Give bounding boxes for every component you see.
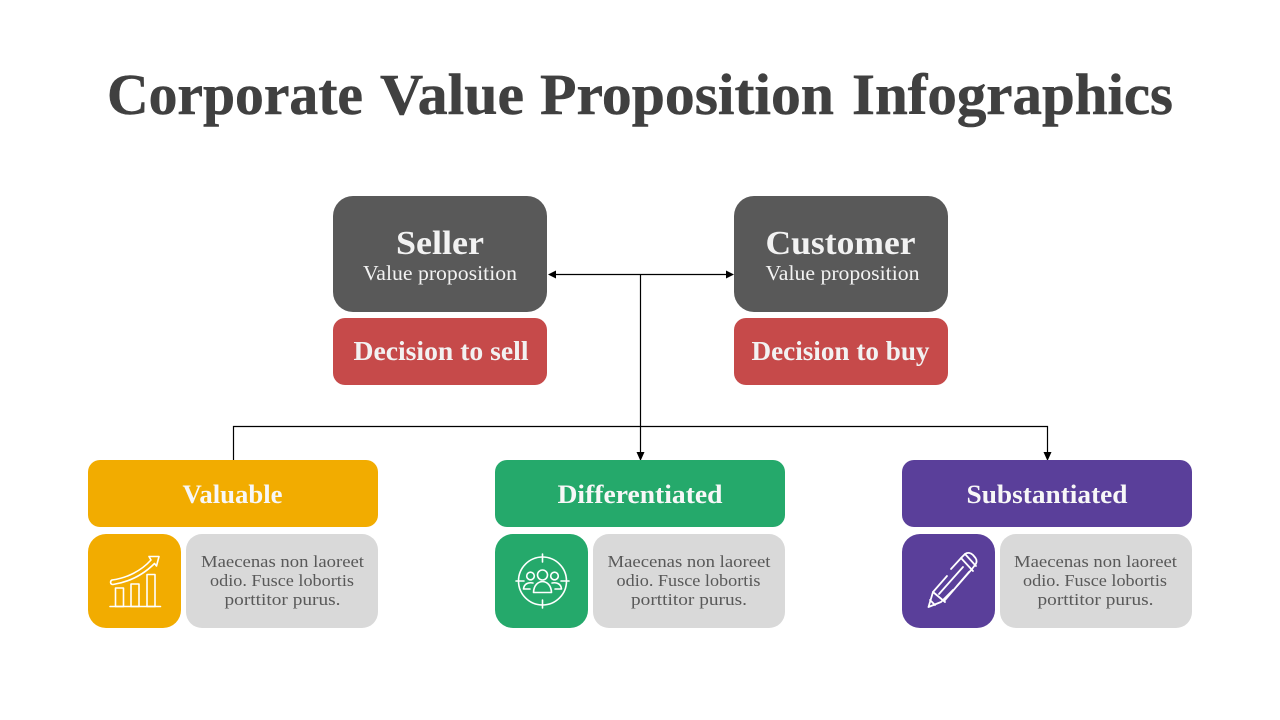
panel: valuable (88, 460, 378, 527)
icon: growth chart (88, 534, 181, 628)
text block: substantiated description: odio. Fusce lobortis (1023, 571, 1167, 590)
panel: differentiated: Differentiated (558, 480, 723, 509)
panel: substantiated: Substantiated (966, 480, 1128, 509)
arrow: seller and customer connector (548, 270, 734, 453)
text block: differentiated description: odio. Fusce lobortis (616, 571, 760, 590)
panel: seller (333, 196, 547, 312)
icon: pencil (902, 534, 995, 628)
seller heading: Seller (396, 225, 484, 262)
panel: decision to sell: Decision to sell (354, 336, 529, 366)
panel: customer (734, 196, 948, 312)
panel: differentiated (495, 460, 785, 527)
text block: valuable description: odio. Fusce lobortis (210, 571, 354, 590)
title: Corporate (107, 62, 363, 127)
text block: valuable description: porttitor purus. (224, 590, 340, 609)
text block: substantiated description: Maecenas non laoreet (1014, 552, 1177, 571)
title (107, 62, 1173, 127)
icon: target audience (495, 534, 588, 628)
title: Value (380, 62, 524, 127)
title: Proposition (540, 62, 834, 127)
text block: substantiated description: porttitor purus. (1038, 590, 1154, 609)
customer subtitle: Value proposition (766, 261, 920, 285)
title: Infographics (852, 62, 1173, 127)
customer heading: Customer (766, 225, 916, 262)
panel: decision to buy (734, 318, 948, 385)
panel: decision to sell (333, 318, 547, 385)
text block: valuable description (186, 534, 378, 628)
text block: valuable description: Maecenas non laoreet (201, 552, 364, 571)
text block: differentiated description: porttitor purus. (631, 590, 747, 609)
arrow: branch connector (234, 426, 1052, 461)
text block: differentiated description (593, 534, 785, 628)
panel: decision to buy: Decision to buy (752, 336, 930, 366)
text block: substantiated description (1000, 534, 1192, 628)
panel: valuable: Valuable (182, 480, 282, 509)
seller subtitle: Value proposition (363, 261, 518, 285)
panel: substantiated (902, 460, 1192, 527)
text block: differentiated description: Maecenas non laoreet (608, 552, 771, 571)
